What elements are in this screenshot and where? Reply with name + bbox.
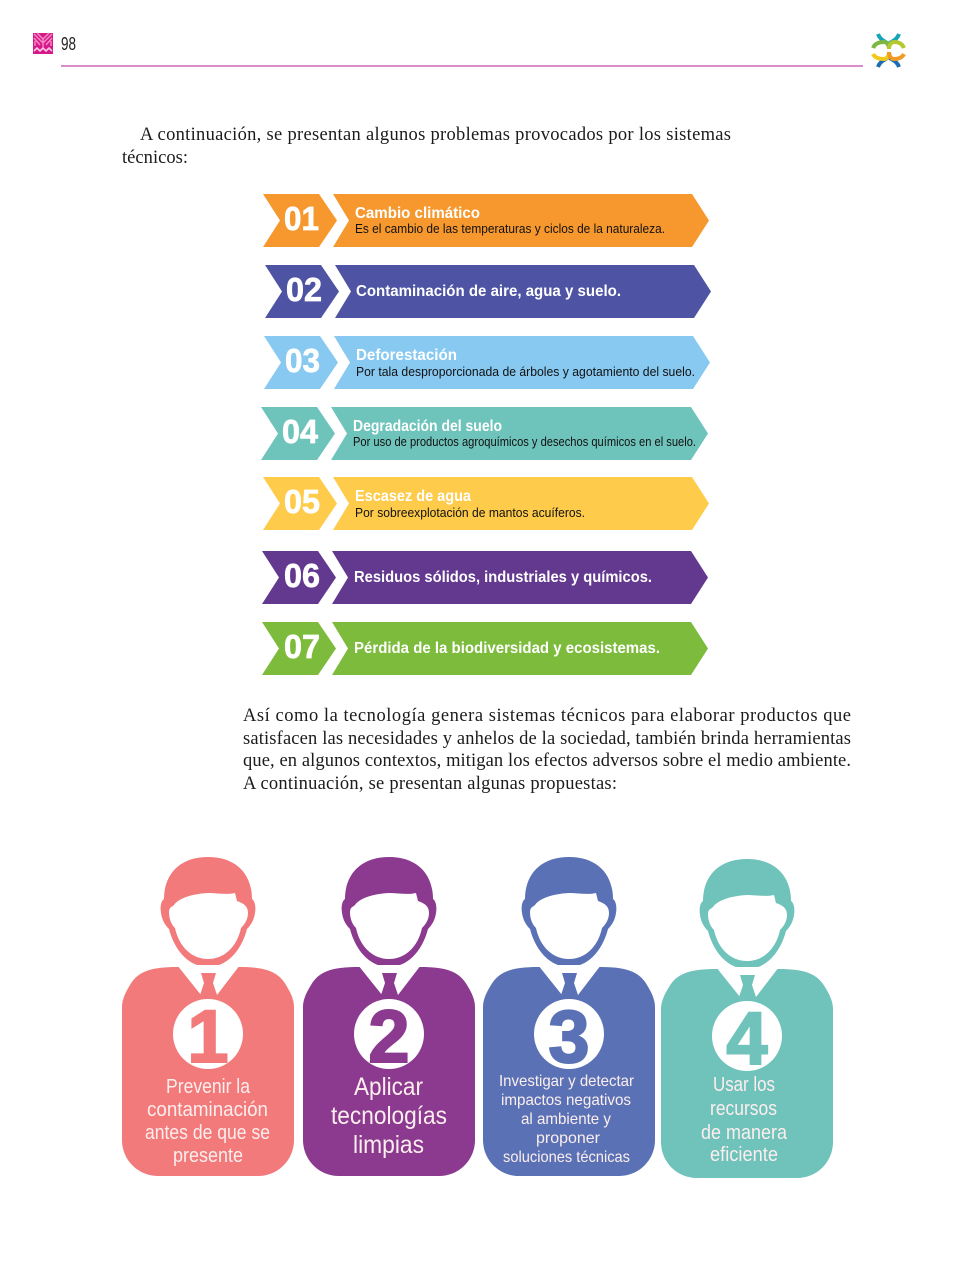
figure 3: proponer xyxy=(536,1130,601,1147)
figure 1: contaminación xyxy=(147,1099,268,1121)
figure 1: 1 xyxy=(187,995,229,1078)
figure 1: presente xyxy=(173,1145,243,1167)
middle paragraph: A continuación, se presentan algunas propuestas: xyxy=(243,774,617,794)
item 03: 03 xyxy=(285,342,320,379)
item 07: Pérdida de la biodiversidad y ecosistemas. xyxy=(354,640,660,657)
item 05: Escasez de agua xyxy=(355,488,471,505)
item 02: Contaminación de aire, agua y suelo. xyxy=(356,283,621,300)
figure 4: Usar los xyxy=(713,1074,775,1096)
item 01: Es el cambio de las temperaturas y ciclos de la naturaleza. xyxy=(355,221,665,236)
item 06: Residuos sólidos, industriales y químicos. xyxy=(354,569,652,586)
middle paragraph: satisfacen las necesidades y anhelos de la sociedad, también brinda herramientas xyxy=(243,729,851,749)
figure 3 xyxy=(483,857,655,1176)
figure 4: eficiente xyxy=(710,1144,778,1166)
page number: 98 xyxy=(61,34,76,54)
figure 4: recursos xyxy=(710,1098,777,1120)
arrow list of problems xyxy=(261,194,711,675)
item 01 xyxy=(263,194,709,247)
item 01: 01 xyxy=(284,200,319,237)
intro text: A continuación, se presentan algunos problemas provocados por los sistemas xyxy=(140,125,731,145)
item 04 xyxy=(261,407,708,460)
figure 2: tecnologías xyxy=(331,1102,447,1130)
item 05: Por sobreexplotación de mantos acuíferos. xyxy=(355,505,585,520)
item 07 xyxy=(262,622,708,675)
figure 4: de manera xyxy=(701,1122,788,1144)
item 03 xyxy=(264,336,710,389)
page number icon xyxy=(33,33,53,54)
item 07: 07 xyxy=(284,628,320,665)
logo xyxy=(873,34,904,67)
item 02 xyxy=(265,265,711,318)
figure 1 xyxy=(122,857,294,1176)
figure 2 xyxy=(303,857,475,1176)
figure 4: 4 xyxy=(726,997,768,1080)
intro text: técnicos: xyxy=(122,148,188,168)
item 05 xyxy=(263,477,709,530)
figure 3: 3 xyxy=(548,995,590,1078)
figure 2: Aplicar xyxy=(354,1073,423,1101)
item 04: Por uso de productos agroquímicos y desechos químicos en el suelo. xyxy=(353,434,696,449)
item 04: 04 xyxy=(282,413,319,450)
item 05: 05 xyxy=(284,483,320,520)
figure 3: Investigar y detectar xyxy=(499,1073,635,1090)
item 03: Deforestación xyxy=(356,347,457,364)
figure 1: antes de que se xyxy=(145,1122,270,1144)
middle paragraph: Así como la tecnología genera sistemas técnicos para elaborar productos que xyxy=(243,706,851,726)
figure 2: limpias xyxy=(353,1131,424,1159)
item 06: 06 xyxy=(284,557,320,594)
proposal figures xyxy=(122,857,833,1178)
figure 3: soluciones técnicas xyxy=(503,1149,630,1166)
item 03: Por tala desproporcionada de árboles y agotamiento del suelo. xyxy=(356,364,695,379)
item 01: Cambio climático xyxy=(355,205,480,222)
figure 3: impactos negativos xyxy=(501,1092,631,1109)
figure 1: Prevenir la xyxy=(166,1076,251,1098)
figure 2: 2 xyxy=(368,995,410,1078)
figure 3: al ambiente y xyxy=(521,1111,611,1128)
item 04: Degradación del suelo xyxy=(353,418,502,435)
item 02: 02 xyxy=(286,271,322,308)
figure 4 xyxy=(661,859,833,1178)
item 06 xyxy=(262,551,708,604)
intro text xyxy=(122,125,731,168)
middle paragraph xyxy=(243,706,851,794)
middle paragraph: que, en algunos contextos, mitigan los efectos adversos sobre el medio ambiente. xyxy=(243,751,851,771)
